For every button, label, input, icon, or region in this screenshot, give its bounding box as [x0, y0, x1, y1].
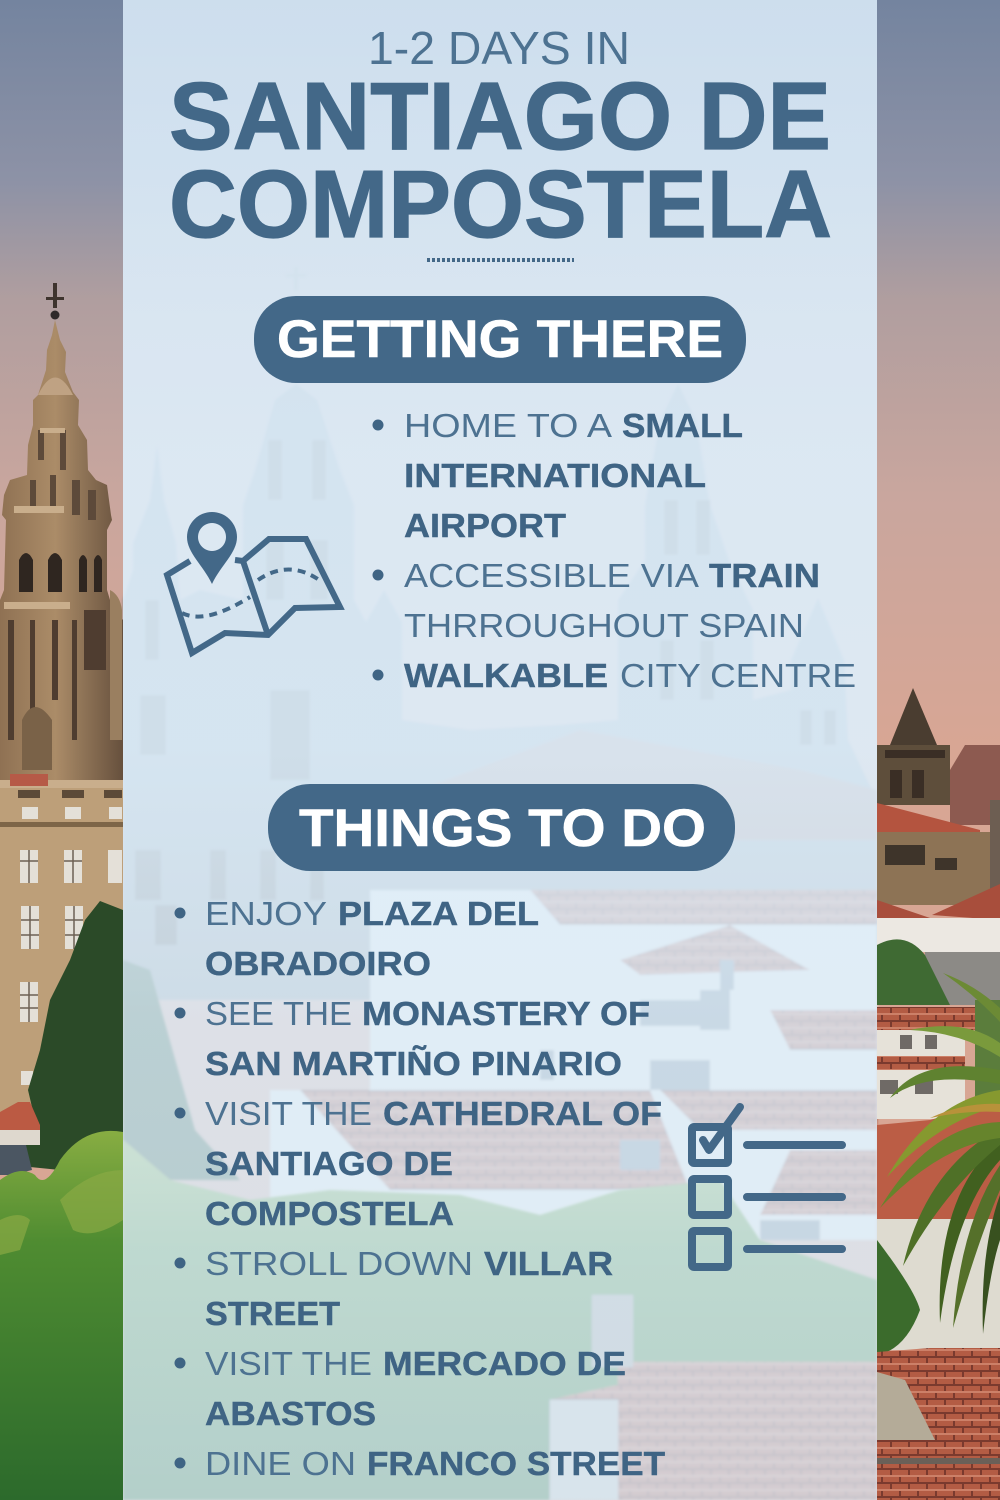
- item: Mercado de Abastos: ABASTOS: [205, 1395, 376, 1432]
- item: Mercado de Abastos: MERCADO DE: [383, 1345, 626, 1382]
- item: Mercado de Abastos: [174, 1345, 626, 1432]
- item: Franco Street: DINE ON: [205, 1445, 356, 1482]
- item: Plaza del Obradoiro: [174, 895, 539, 982]
- list: things to do: [174, 895, 665, 1482]
- title line: Santiago de: SANTIAGO DE: [169, 63, 831, 170]
- item: Franco Street: [174, 1445, 665, 1482]
- section heading: getting there: [254, 296, 746, 383]
- photo: trees behind panel: [123, 960, 877, 1500]
- item: Cathedral: COMPOSTELA: [205, 1195, 454, 1232]
- bullet: airport: [372, 407, 743, 544]
- bullet: train: THRROUGHOUT SPAIN: [404, 607, 804, 644]
- item: Cathedral: CATHEDRAL OF: [383, 1095, 662, 1132]
- title block: [169, 22, 832, 258]
- bullet: train: ACCESSIBLE VIA: [404, 557, 699, 594]
- photo: palm tree: [880, 973, 1000, 1334]
- item: Plaza del Obradoiro: OBRADOIRO: [205, 945, 431, 982]
- photo: town buildings behind panel: [270, 890, 877, 1240]
- item: Villar Street: [174, 1245, 613, 1332]
- item: Monastery: MONASTERY OF: [362, 995, 650, 1032]
- item: Villar Street: VILLAR: [484, 1245, 613, 1282]
- icon: map with location pin: [167, 512, 340, 653]
- item: Cathedral: VISIT THE: [205, 1095, 372, 1132]
- title line: 1-2 days in: 1-2 DAYS IN: [368, 22, 630, 74]
- bullet: airport: INTERNATIONAL: [404, 457, 706, 494]
- item: Monastery: SEE THE: [205, 995, 352, 1032]
- bullet: train: TRAIN: [709, 557, 820, 594]
- item: Plaza del Obradoiro: ENJOY: [205, 895, 327, 932]
- photo: right buildings: [877, 688, 1000, 1500]
- bullet: walkable: [372, 657, 856, 694]
- item: Monastery: SAN MARTIÑO PINARIO: [205, 1045, 622, 1082]
- item: Cathedral: SANTIAGO DE: [205, 1145, 453, 1182]
- bullet: airport: AIRPORT: [404, 507, 566, 544]
- photo: left trees: [0, 901, 123, 1500]
- item: Mercado de Abastos: VISIT THE: [205, 1345, 372, 1382]
- title line: Compostela: COMPOSTELA: [169, 151, 832, 258]
- item: Franco Street: FRANCO STREET: [367, 1445, 665, 1482]
- photo: left cathedral tower: [0, 283, 123, 1138]
- section heading: things to do: THINGS TO DO: [299, 799, 706, 858]
- photo: faint cathedral behind panel: [123, 267, 877, 1000]
- bullet: airport: SMALL: [622, 407, 743, 444]
- dotted divider: [427, 258, 574, 262]
- bullet: walkable: CITY CENTRE: [620, 657, 856, 694]
- icon: checklist: [692, 1107, 842, 1267]
- item: Villar Street: STREET: [205, 1295, 340, 1332]
- item: Monastery: [174, 995, 650, 1082]
- list: getting there: [372, 407, 856, 694]
- bullet: airport: HOME TO A: [404, 407, 612, 444]
- section heading: getting there: GETTING THERE: [277, 310, 723, 369]
- bullet: train: [372, 557, 820, 644]
- section heading: things to do: [268, 784, 735, 871]
- translucent central panel: [123, 0, 877, 1500]
- bullet: walkable: WALKABLE: [404, 657, 608, 694]
- item: Villar Street: STROLL DOWN: [205, 1245, 473, 1282]
- item: Cathedral: [174, 1095, 662, 1232]
- item: Plaza del Obradoiro: PLAZA DEL: [338, 895, 539, 932]
